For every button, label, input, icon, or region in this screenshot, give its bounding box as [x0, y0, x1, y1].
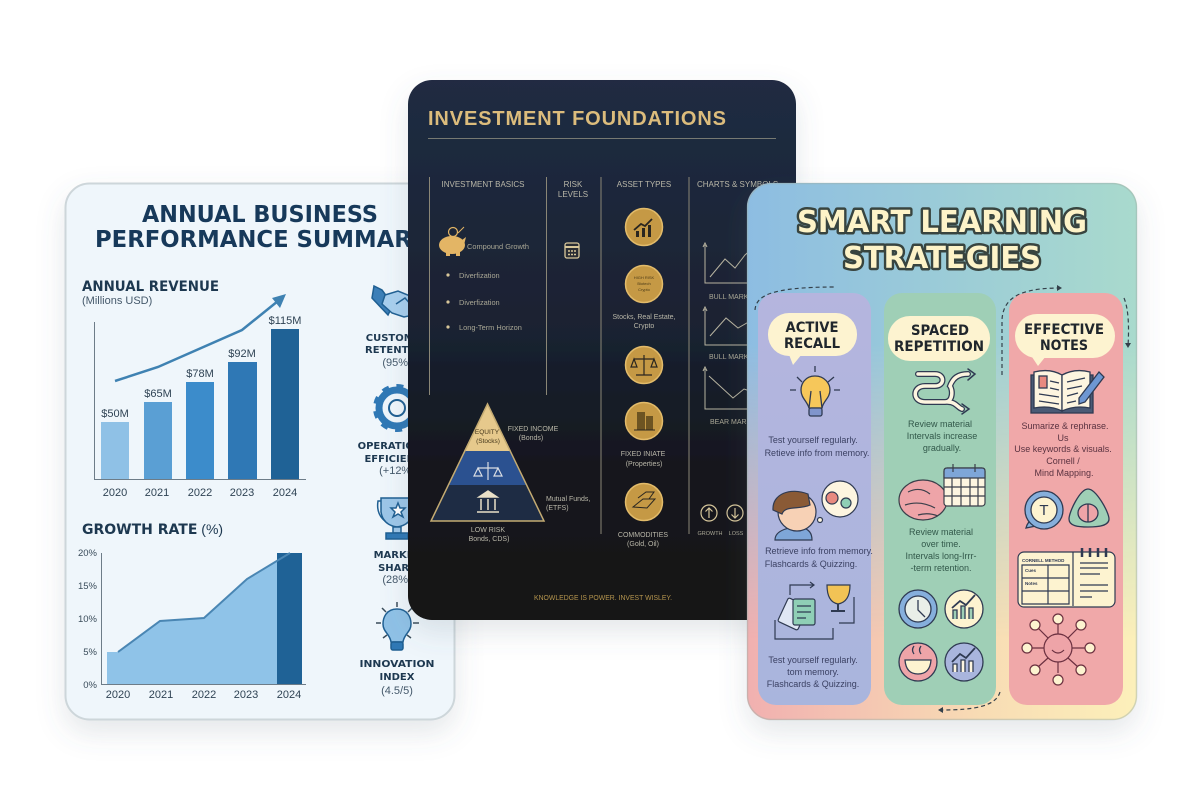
label: customer retention [365, 333, 429, 369]
heading: smart learning strategies: SMART LEARNING [797, 205, 1087, 240]
bar chart: annual revenue: $78M [186, 368, 214, 380]
column headers: RISK [564, 180, 583, 189]
text: circle label [634, 275, 655, 292]
text: test yourself two: tom memory. [787, 667, 839, 677]
labels: pyramid: LOW RISK [471, 527, 505, 534]
icon: innovation lightbulb [376, 602, 419, 650]
pyramid: risk levels: EQUITY [475, 429, 500, 436]
bar chart: annual revenue: $92M [228, 348, 256, 360]
area chart: growth rate: 15% [78, 581, 98, 592]
area chart: growth rate: 0% [83, 680, 98, 691]
line chart: bull market 2 [703, 307, 765, 361]
column headers: INVESTMENT BASICS [442, 180, 524, 189]
arrow: revenue trend [115, 294, 286, 381]
labels: pyramid: (Bonds) [519, 435, 543, 442]
icons: growth and loss [697, 505, 744, 537]
text: circle label: Biotech [637, 281, 651, 286]
labels: asset types [612, 314, 676, 548]
label: customer retention: (95%) [382, 357, 412, 369]
text: review material: Review material [908, 419, 972, 429]
bar chart: annual revenue: $115M [269, 315, 301, 327]
label: market share: SHARE [378, 563, 416, 574]
heading: business summary: ANNUAL BUSINESS [142, 202, 378, 228]
text: retrieve info [765, 546, 873, 569]
speech bubble: effective notes: NOTES [1040, 338, 1088, 354]
labels: pyramid [469, 426, 590, 543]
text: circle label: Crypto [638, 287, 651, 292]
icon: building glyph [634, 412, 655, 430]
icon: trophy [378, 498, 413, 539]
labels: asset types: Stocks, Real Estate, [612, 314, 676, 321]
icon: scales glyph [631, 355, 657, 375]
icon: growth chart glyph [634, 219, 652, 237]
bar chart: annual revenue: $65M [144, 388, 172, 400]
label: operational efficiency: (+12%) [379, 465, 415, 477]
label: customer retention: RETENTION [365, 345, 429, 356]
text: review over time: -term retention. [910, 563, 972, 573]
area chart: growth rate [78, 548, 306, 701]
panel: active recall [758, 293, 873, 705]
text: test yourself two: Flashcards & Quizzing. [767, 679, 859, 689]
panel: smart learning strategies [747, 183, 1137, 720]
speech bubble: effective notes [1015, 314, 1115, 366]
list: investment basics: Long-Term Horizon [459, 323, 522, 332]
area chart: growth rate: 20% [78, 548, 98, 559]
labels: asset types: (Gold, Oil) [627, 541, 659, 548]
panel: spaced repetition [884, 293, 996, 705]
panel: effective notes [1009, 293, 1123, 705]
icon: cornell notebook: Cues [1025, 568, 1037, 573]
labels: pyramid: Bonds, CDS) [469, 536, 509, 543]
labels: asset types: Crypto [634, 323, 654, 330]
text: test yourself two [767, 655, 859, 689]
icon: brain and calendar [899, 464, 985, 520]
column headers: ASSET TYPES [617, 180, 671, 189]
icon: rising chart [945, 590, 983, 628]
heading: annual revenue: (Millions USD) [82, 295, 152, 307]
text: review material: gradually. [923, 443, 961, 453]
label: innovation index [360, 659, 434, 697]
heading: smart learning strategies: STRATEGIES [843, 241, 1041, 276]
label: operational efficiency: OPERATIONAL [358, 441, 437, 452]
column headers [442, 180, 778, 199]
panel: investment foundations [408, 80, 796, 620]
text: summarize: Mind Mapping. [1034, 468, 1094, 478]
text: test yourself two: Test yourself regularly. [768, 655, 858, 665]
label: innovation index: INDEX [380, 672, 415, 683]
labels: pyramid: (ETFS) [546, 505, 569, 512]
text: review material: Intervals increase [907, 431, 977, 441]
bar chart: annual revenue [94, 294, 306, 499]
area chart: growth rate: 10% [78, 614, 98, 625]
icon: bowl [899, 643, 937, 681]
labels: pyramid: FIXED INCOME [508, 426, 559, 433]
text: test yourself: Test yourself regularly. [768, 435, 858, 445]
speech bubble: active recall: RECALL [784, 336, 840, 352]
text: summarize: Sumarize & rephrase. [1021, 421, 1109, 431]
icon: cornell notebook: CORNELL METHOD [1022, 558, 1065, 563]
text: summarize: Us [1058, 433, 1069, 443]
icon: quiz cycle with trophy [775, 582, 854, 639]
text: summarize [1014, 421, 1112, 478]
speech bubble: active recall: ACTIVE [786, 320, 838, 336]
label: operational efficiency [358, 441, 437, 477]
heading: investment foundations: INVESTMENT FOUNDATIONS [428, 108, 726, 130]
list: investment basics [446, 242, 529, 332]
text: circle label: HIGH RISK [634, 275, 655, 280]
icon: gold bars glyph [633, 492, 655, 508]
icon: piggy bank [439, 227, 466, 256]
label: innovation index: (4.5/5) [381, 685, 413, 697]
icons: growth and loss: LOSS [729, 531, 744, 537]
area chart: growth rate: 2023 [234, 689, 258, 701]
pyramid: risk levels: (Stocks) [476, 438, 500, 445]
icon: winding arrows [915, 369, 975, 414]
icon: gear [375, 386, 419, 430]
label: operational efficiency: EFFICIENCY [364, 454, 430, 465]
line chart: bull market 2: BULL MARKET [709, 354, 758, 361]
text: review material [907, 419, 977, 453]
icon: lightbulb [790, 366, 840, 416]
bar chart: annual revenue: 2024 [273, 487, 297, 499]
heading: annual revenue: ANNUAL REVENUE [82, 279, 219, 295]
icon: clock [899, 590, 937, 628]
column headers: CHARTS & SYMBOLS [697, 180, 778, 189]
area chart: growth rate: 5% [83, 647, 98, 658]
icon: open book and pencil [1031, 371, 1104, 413]
bar chart: annual revenue: 2022 [188, 487, 212, 499]
labels: asset types: FIXED INIATE [621, 451, 666, 458]
bar chart: annual revenue: 2023 [230, 487, 254, 499]
pyramid: risk levels [431, 404, 544, 521]
label: market share: (28%) [382, 574, 412, 586]
speech bubble: spaced repetition: SPACED [911, 323, 969, 339]
labels: asset types: COMMODITIES [618, 532, 668, 539]
icon: brain triangle [1069, 489, 1109, 527]
text: test yourself: Retieve info from memory. [765, 448, 869, 458]
speech bubble: spaced repetition: REPETITION [894, 339, 984, 355]
dashed arrows [755, 287, 1129, 710]
list: investment basics: Diverfization [459, 298, 500, 307]
heading: annual revenue [82, 279, 219, 307]
heading: business summary [95, 202, 427, 253]
area chart: growth rate: 2021 [149, 689, 173, 701]
footer tagline: KNOWLEDGE IS POWER. INVEST WISLEY. [534, 593, 672, 602]
area chart: growth rate: 2024 [277, 689, 301, 701]
bar chart: annual revenue: 2020 [103, 487, 127, 499]
labels: pyramid: Mutual Funds, [546, 496, 590, 503]
bar chart: annual revenue: $50M [101, 408, 129, 420]
area chart: growth rate: 2022 [192, 689, 216, 701]
icon: speech T badge: T [1039, 502, 1049, 519]
text: review over time: over time. [921, 539, 961, 549]
label: customer retention: CUSTOMER [366, 333, 429, 344]
line chart: bull market 1 [703, 240, 765, 301]
line chart: bear market: BEAR MARKET [710, 419, 761, 426]
speech bubble: active recall [768, 313, 857, 365]
heading: business summary: PERFORMANCE SUMMARY [95, 227, 427, 253]
icon: cornell notebook [1018, 548, 1115, 607]
icon: thinking boy [773, 481, 858, 540]
line chart: bear market [703, 367, 765, 426]
text: review over time [905, 527, 977, 573]
icon: handshake [372, 286, 420, 317]
icon: calendar [565, 243, 579, 258]
column headers: LEVELS [558, 190, 588, 199]
text: review over time: Review material [909, 527, 973, 537]
list: investment basics: Compound Growth [467, 242, 529, 251]
icon: growth badge [945, 643, 983, 681]
icon: speech T badge [1025, 491, 1063, 529]
heading: smart learning strategies [797, 205, 1087, 276]
bar chart: annual revenue: 2021 [145, 487, 169, 499]
label: innovation index: INNOVATION [360, 659, 434, 670]
icons: growth and loss: GROWTH [697, 531, 723, 537]
heading: growth rate: GROWTH RATE (%) [82, 521, 223, 538]
icon: cornell notebook: Notes [1025, 581, 1038, 586]
speech bubble: effective notes: EFFECTIVE [1024, 322, 1104, 338]
panel: annual business performance summary [66, 184, 454, 720]
text: summarize: Use keywords & visuals. [1014, 444, 1112, 454]
collage of three infographic cards [58, 80, 1144, 740]
line chart: bull market 1: BULL MARKET [709, 294, 758, 301]
text: test yourself [765, 435, 869, 458]
icon: mind map [1022, 614, 1095, 685]
text: retrieve info: Retrieve info from memory. [765, 546, 873, 556]
list: investment basics: Diverfization [459, 271, 500, 280]
label: market share: MARKET [374, 550, 421, 561]
labels: asset types: (Properties) [626, 461, 662, 468]
icons: asset type circles [626, 208, 662, 520]
area chart: growth rate: 2020 [106, 689, 130, 701]
text: review over time: Intervals long-Irrr- [905, 551, 977, 561]
text: summarize: Cornell / [1046, 456, 1080, 466]
label: market share [374, 550, 421, 586]
text: retrieve info: Flashcards & Quizzing. [765, 559, 857, 569]
speech bubble: spaced repetition [888, 316, 990, 361]
